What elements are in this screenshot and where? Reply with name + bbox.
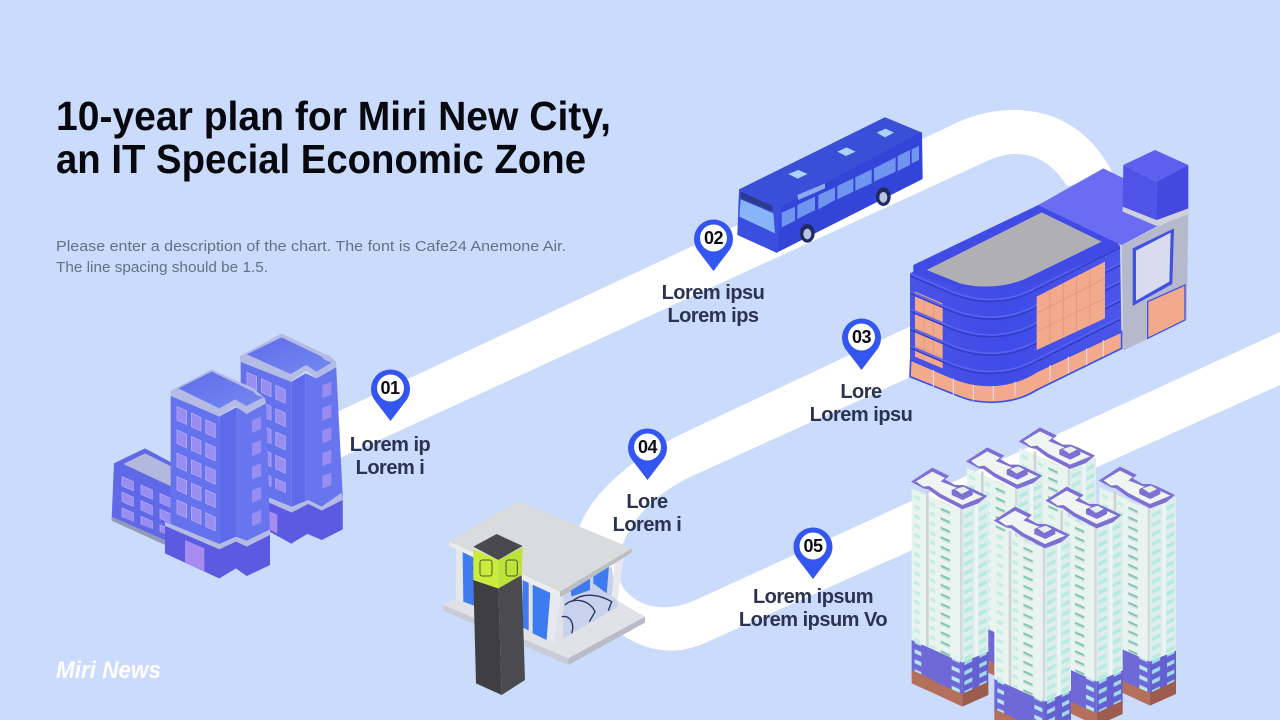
illustration: office buildings (112, 333, 343, 578)
title: 10-year plan for Miri New City, (56, 93, 611, 139)
description text: Please enter a description of the chart. The font is Cafe24 Anemone Air. (56, 238, 566, 255)
pin 03 with label: 03 (852, 327, 871, 347)
pin 01 with label (350, 369, 431, 479)
pin 04 with label (613, 428, 681, 536)
pin 02 with label: Lorem ipsu (662, 282, 764, 304)
pin 02 with label (662, 219, 764, 327)
description text (56, 238, 566, 276)
brand: Miri News: Miri News (56, 657, 161, 684)
illustration: apartment towers (911, 427, 1176, 720)
pin 05 with label (739, 527, 887, 631)
pin 03 with label (810, 318, 912, 426)
pin 01 with label: 01 (380, 378, 400, 398)
road: lower route (574, 325, 1280, 651)
pin 02 with label: Lorem ips (667, 305, 759, 327)
description text: The line spacing should be 1.5. (56, 259, 268, 276)
title (56, 93, 611, 182)
pin 03 with label: Lorem ipsu (810, 404, 912, 426)
pin 04 with label: 04 (638, 437, 657, 457)
illustration: blue city bus (738, 118, 922, 252)
pin 05 with label: Lorem ipsum Vo (739, 609, 887, 631)
title: an IT Special Economic Zone (56, 136, 586, 182)
pin 05 with label: 05 (803, 536, 823, 556)
pin 02 with label: 02 (704, 228, 723, 248)
illustration: subway station entrance (443, 501, 645, 695)
illustration: shopping mall (910, 150, 1189, 402)
pin 01 with label: Lorem ip (350, 434, 431, 456)
pin 03 with label: Lore (840, 381, 882, 403)
road: upper route (337, 110, 1115, 459)
pin 01 with label: Lorem i (356, 457, 424, 479)
pin 04 with label: Lore (626, 491, 668, 513)
pin 04 with label: Lorem i (613, 514, 681, 536)
pin 05 with label: Lorem ipsum (753, 586, 873, 608)
